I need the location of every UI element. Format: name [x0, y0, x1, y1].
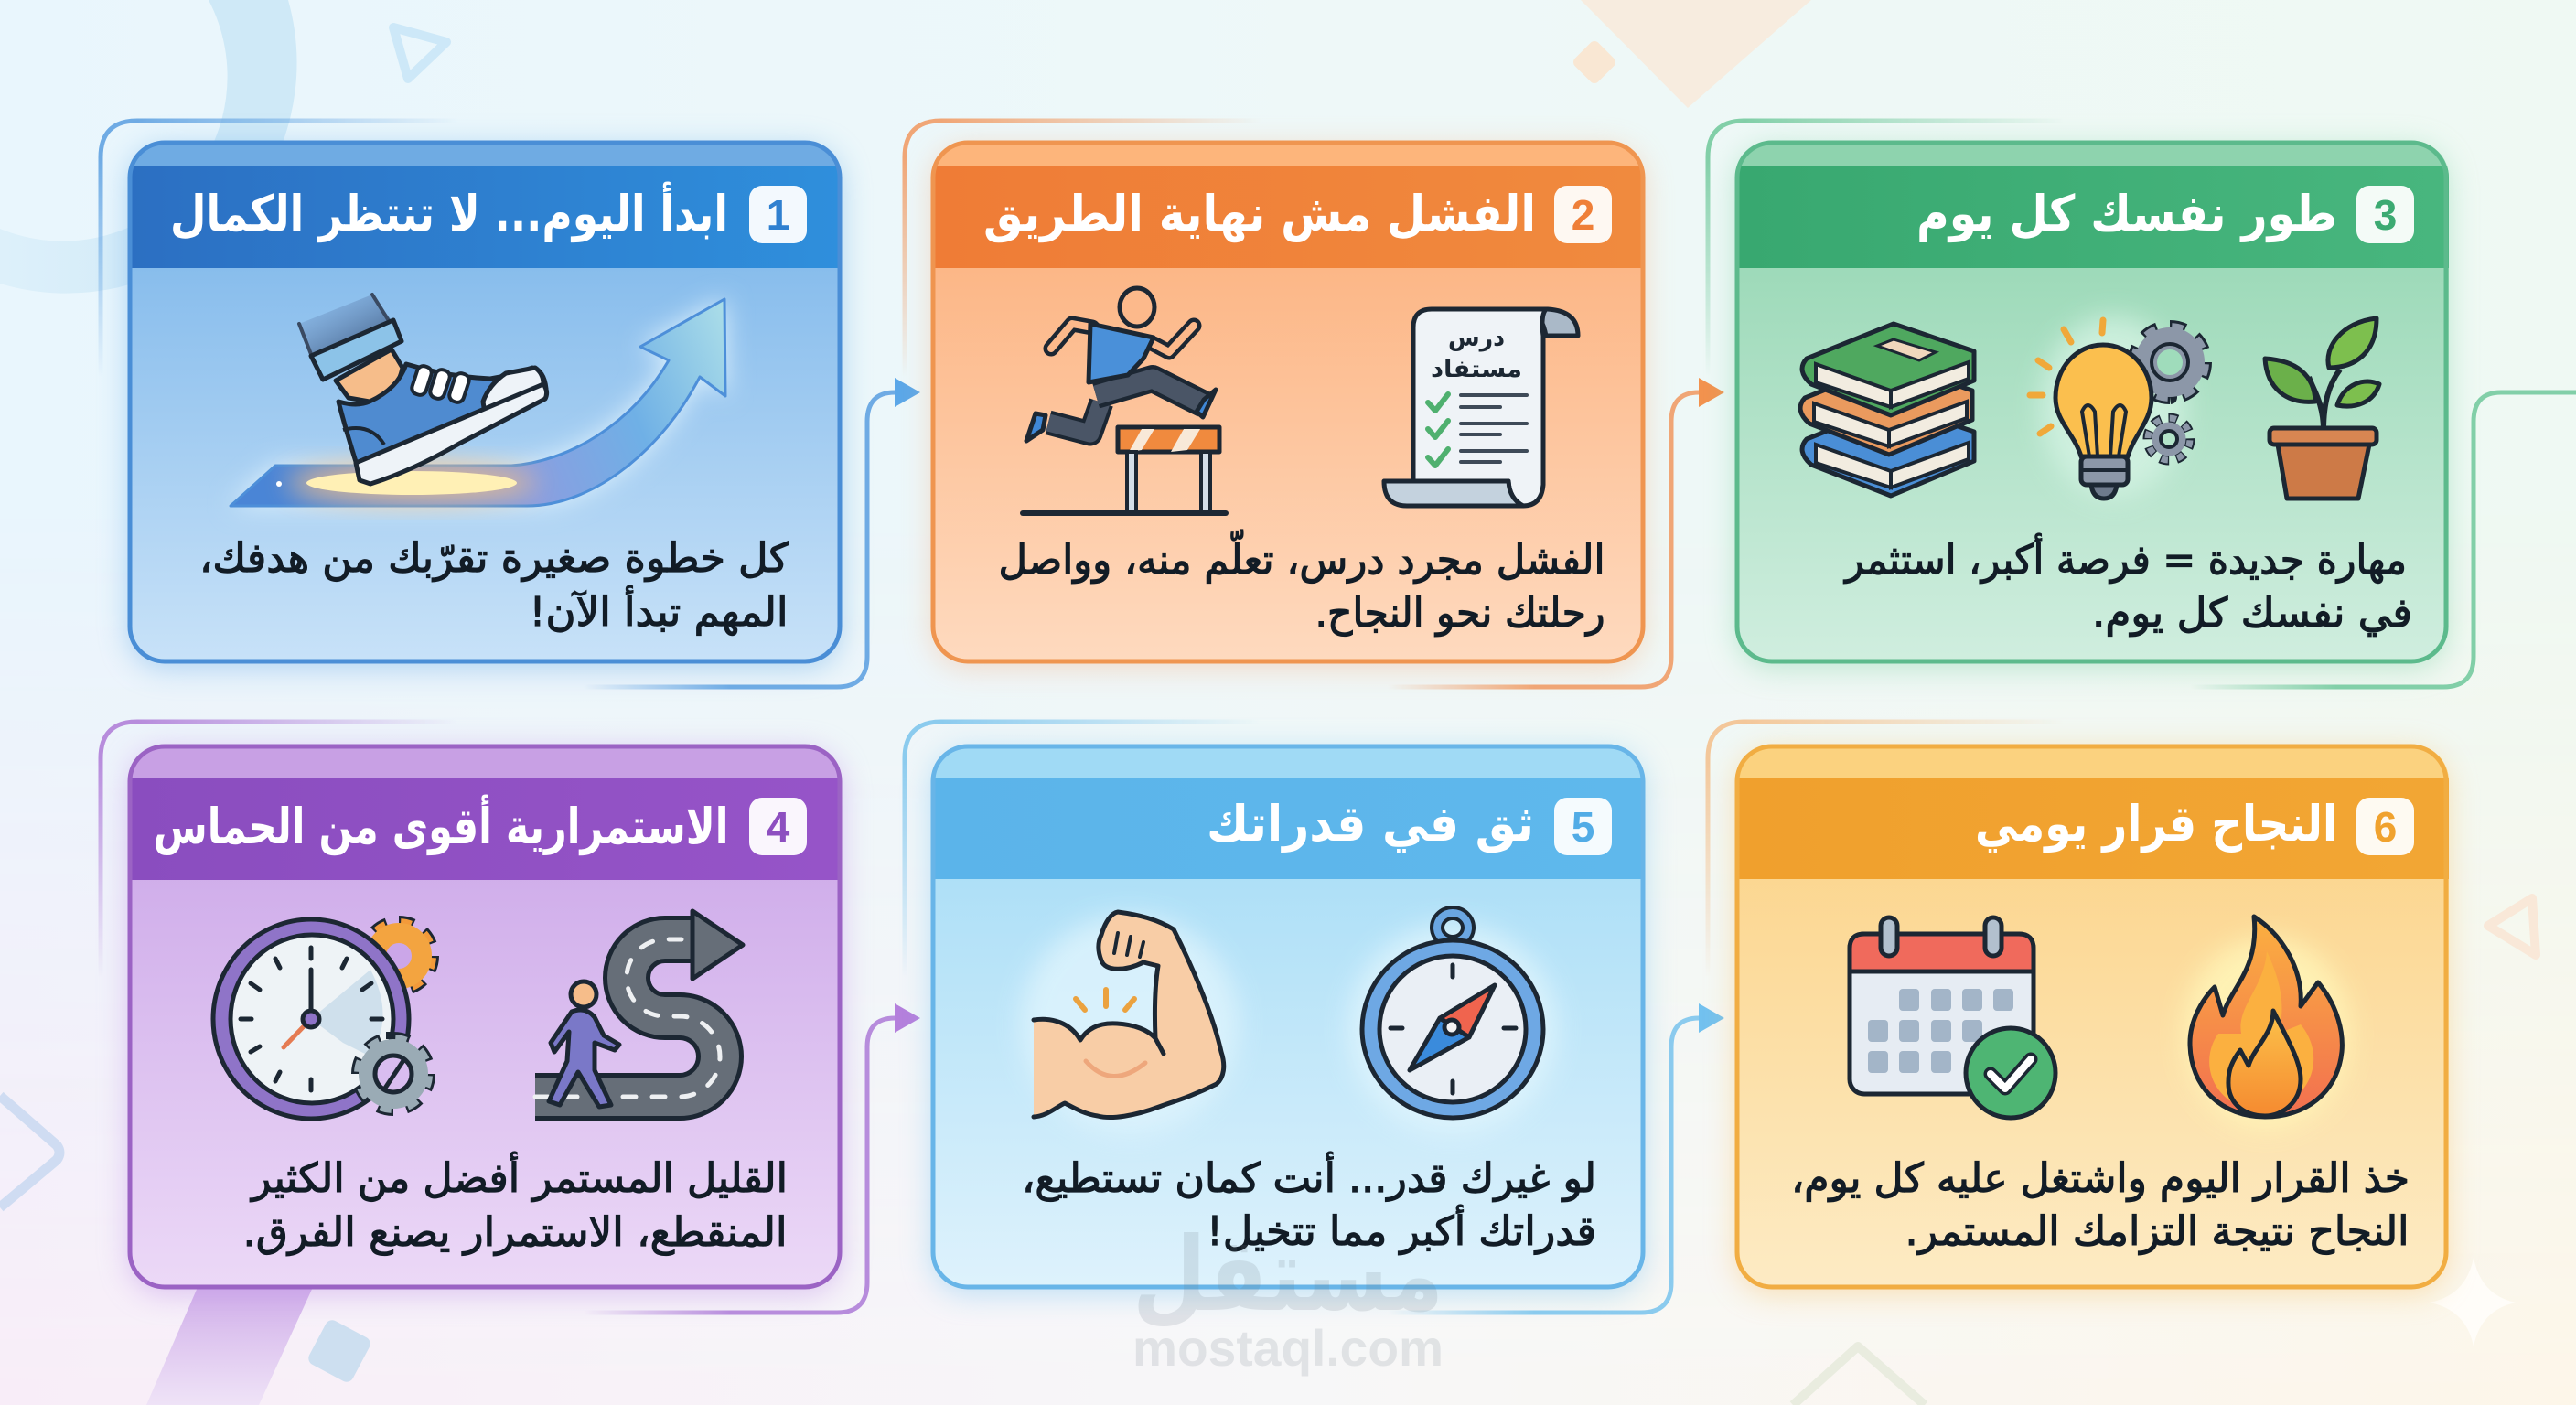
body text: القليل المستمر أفضل من الكثير	[250, 1152, 788, 1202]
body text: المنقطع، الاستمرار يصنع الفرق.	[243, 1209, 787, 1256]
body text	[1791, 1155, 2410, 1255]
body text	[999, 530, 1605, 637]
heading: ثق في قدراتك	[1207, 795, 1534, 853]
heading: الفشل مش نهاية الطريق	[983, 185, 1536, 242]
connector 2 to 3	[905, 121, 1724, 687]
number badge: 6	[2374, 803, 2397, 851]
connector 1 to 2	[101, 121, 920, 687]
icon: clock with gears	[213, 919, 432, 1119]
number badge	[2356, 798, 2414, 855]
body text: رحلتك نحو النجاح.	[1315, 590, 1605, 637]
body text: كل خطوة صغيرة تقرّبك من هدفك،	[199, 535, 789, 582]
body text	[243, 1152, 788, 1256]
body text	[1843, 533, 2412, 637]
body text: الفشل مجرد درس، تعلّم منه، وواصل	[999, 530, 1605, 584]
number badge	[1554, 186, 1612, 243]
icon: runner jumping hurdle	[1023, 288, 1226, 513]
number badge: 3	[2374, 191, 2397, 239]
number badge	[749, 186, 807, 243]
connector 4 to 5	[101, 722, 920, 1313]
icon: lesson scroll	[1384, 309, 1578, 506]
icon: lesson scroll: مستفاد	[1431, 356, 1522, 383]
panel: step 5	[931, 745, 1645, 1294]
body text: خذ القرار اليوم واشتغل عليه كل يوم،	[1791, 1155, 2410, 1202]
heading: ابدأ اليوم... لا تنتظر الكمال	[170, 181, 728, 242]
panel: step 4	[128, 745, 842, 1294]
body text	[199, 535, 789, 636]
panel: step 2	[931, 141, 1645, 669]
number badge: 1	[767, 191, 789, 239]
number badge: 4	[767, 803, 790, 851]
number badge	[2356, 186, 2414, 243]
icon: lesson scroll: درس	[1448, 325, 1505, 352]
watermark: مستقل	[1132, 1216, 1444, 1335]
connector 5 to 6	[905, 722, 1724, 1313]
body text: مهارة جديدة = فرصة أكبر، استثمر	[1843, 533, 2407, 584]
body text: قدراتك أكبر مما تتخيل!	[1207, 1205, 1596, 1255]
icon: shoe stepping on rising arrow	[231, 295, 725, 506]
icon: winding road with walker	[535, 911, 743, 1107]
icon: flame	[2183, 917, 2351, 1130]
number badge	[1554, 798, 1612, 855]
heading: طور نفسك كل يوم	[1916, 185, 2337, 242]
panel: step 1	[128, 141, 842, 669]
body text: في نفسك كل يوم.	[2092, 590, 2412, 637]
number badge: 5	[1572, 803, 1594, 851]
body text: النجاح نتيجة التزامك المستمر.	[1905, 1208, 2410, 1255]
icon: flexed arm	[1020, 912, 1240, 1134]
icon: stack of books	[1800, 324, 1974, 496]
number badge: 2	[1572, 191, 1594, 239]
heading: الاستمرارية أقوى من الحماس	[154, 794, 728, 855]
connector 3 to 4	[1708, 121, 2576, 687]
body text	[1022, 1152, 1596, 1255]
body text: لو غيرك قدر... أنت كمان تستطيع،	[1022, 1152, 1596, 1202]
connector into 6 frame	[1708, 722, 2074, 978]
panel: step 6	[1735, 745, 2449, 1294]
icon: compass	[1347, 913, 1558, 1134]
body text: المهم تبدأ الآن!	[529, 585, 789, 636]
icon: potted plant	[2265, 318, 2379, 499]
heading: النجاح قرار يومي	[1975, 795, 2337, 853]
icon: calendar with check	[1850, 917, 2055, 1118]
panel: step 3	[1735, 141, 2449, 669]
icon: light bulb and gears	[2030, 316, 2205, 499]
watermark: mostaql.com	[1132, 1319, 1444, 1377]
number badge	[749, 798, 807, 855]
watermark	[1132, 1216, 1444, 1377]
